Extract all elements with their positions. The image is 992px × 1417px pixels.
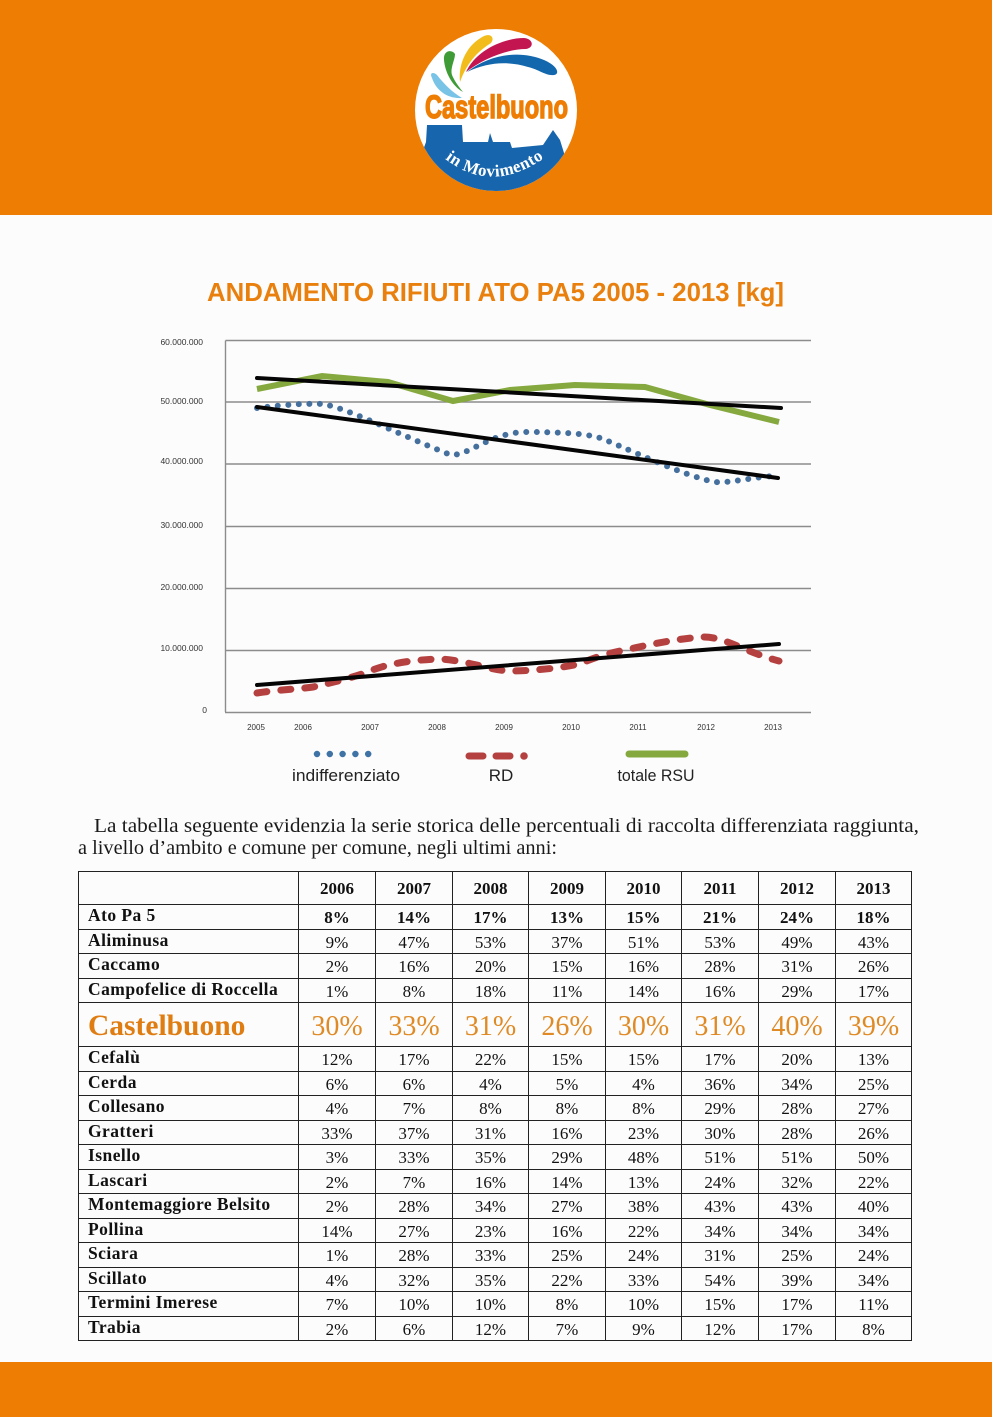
row: Gratteri: 23% — [628, 1124, 659, 1143]
data table — [78, 871, 912, 1341]
x axis labels: 2009 — [495, 723, 513, 732]
x axis labels: 2011 — [629, 723, 647, 732]
row: Termini Imerese: 8% — [556, 1295, 578, 1314]
row: Montemaggiore Belsito: 28% — [398, 1197, 430, 1216]
series: indifferenziato — [257, 404, 779, 482]
row: Ato Pa 5: 15% — [626, 908, 660, 927]
logo: Castelbuono in Movimento — [415, 29, 577, 191]
legend: RD: RD — [489, 766, 513, 785]
row: Montemaggiore Belsito: Montemaggiore Belsito — [88, 1194, 271, 1214]
row: Castelbuono highlighted — [88, 1010, 899, 1042]
row: Scillato: 54% — [704, 1271, 736, 1290]
row: Isnello: 35% — [475, 1148, 506, 1167]
intro paragraph: La tabella seguente evidenzia la serie storica delle percentuali di raccolta differenziata raggiunta, — [94, 816, 919, 837]
row: Lascari: 2% — [326, 1173, 348, 1192]
row: Trabia: 7% — [556, 1320, 578, 1339]
legend: totale RSU — [618, 754, 694, 785]
row: Cerda — [88, 1072, 889, 1094]
row: Castelbuono highlighted: 31% — [465, 1011, 516, 1042]
row: Castelbuono highlighted: 33% — [388, 1011, 440, 1042]
row: Trabia: 8% — [862, 1320, 885, 1339]
row: Lascari — [88, 1170, 889, 1192]
row: Lascari: 16% — [475, 1173, 506, 1192]
row: Cefalù: 15% — [551, 1050, 583, 1069]
row: Trabia: Trabia — [88, 1317, 141, 1337]
row: Collesano: 28% — [781, 1099, 813, 1118]
x axis labels: 2010 — [562, 723, 580, 732]
row: Aliminusa: Aliminusa — [88, 930, 169, 950]
row: Campofelice di Roccella: 11% — [552, 982, 582, 1001]
row: Collesano: 8% — [632, 1099, 655, 1118]
x axis labels: 2007 — [361, 723, 379, 732]
row: Isnello: 51% — [781, 1148, 813, 1167]
row: Isnello: 51% — [704, 1148, 736, 1167]
footer band — [0, 1362, 992, 1417]
row: Scillato: 34% — [858, 1271, 889, 1290]
row: Castelbuono highlighted: 31% — [694, 1011, 746, 1042]
table header: 2013 — [856, 878, 890, 898]
row: Scillato: Scillato — [88, 1268, 147, 1288]
row: Caccamo: Caccamo — [88, 954, 160, 974]
row: Caccamo: 26% — [858, 957, 889, 976]
row: Castelbuono highlighted: 39% — [848, 1011, 899, 1042]
intro paragraph: a livello d’ambito e comune per comune, negli ultimi anni: — [78, 838, 557, 859]
row: Scillato: 33% — [628, 1271, 659, 1290]
row: Campofelice di Roccella: 29% — [781, 982, 813, 1001]
row: Aliminusa: 43% — [858, 933, 889, 952]
x axis labels: 2008 — [428, 723, 446, 732]
row: Gratteri: 31% — [475, 1124, 506, 1143]
x axis labels: 2012 — [697, 723, 715, 732]
y axis labels: 40.000.000 — [160, 456, 203, 466]
row: Isnello: 3% — [326, 1148, 348, 1167]
row: Campofelice di Roccella: 17% — [858, 982, 889, 1001]
row: Lascari: 14% — [551, 1173, 583, 1192]
row: Collesano: 4% — [326, 1099, 348, 1118]
series: totale RSU — [257, 376, 779, 422]
row: Collesano: 27% — [858, 1099, 889, 1118]
row: Cefalù: 17% — [704, 1050, 736, 1069]
row: Sciara: 24% — [628, 1246, 659, 1265]
row: Pollina: 34% — [858, 1222, 889, 1241]
row: Campofelice di Roccella: Campofelice di Roccella — [88, 979, 278, 999]
row: Scillato: 22% — [551, 1271, 583, 1290]
row: Lascari: 22% — [858, 1173, 889, 1192]
row: Montemaggiore Belsito: 43% — [781, 1197, 813, 1216]
table header: 2011 — [703, 878, 737, 898]
row: Cefalù: 20% — [781, 1050, 813, 1069]
y axis labels: 60.000.000 — [160, 337, 203, 347]
row: Pollina: 23% — [475, 1222, 506, 1241]
row: Aliminusa — [88, 930, 889, 952]
row: Ato Pa 5: 18% — [856, 908, 890, 927]
row: Montemaggiore Belsito: 43% — [704, 1197, 736, 1216]
x axis labels — [247, 723, 782, 732]
row: Caccamo — [88, 954, 889, 976]
row: Cefalù: 22% — [475, 1050, 506, 1069]
row: Castelbuono highlighted: Castelbuono — [88, 1010, 245, 1042]
row: Termini Imerese: 10% — [398, 1295, 430, 1314]
x axis labels: 2006 — [294, 723, 312, 732]
row: Aliminusa: 9% — [326, 933, 348, 952]
row: Aliminusa: 47% — [398, 933, 430, 952]
row: Montemaggiore Belsito — [88, 1194, 889, 1216]
row: Sciara: 1% — [326, 1246, 348, 1265]
row: Lascari: 32% — [781, 1173, 813, 1192]
row: Gratteri — [88, 1121, 889, 1143]
intro paragraph — [78, 816, 919, 859]
y axis labels — [160, 337, 207, 715]
table header: 2010 — [626, 878, 660, 898]
row: Gratteri: Gratteri — [88, 1121, 154, 1141]
plot grid — [225, 340, 811, 712]
series: RD — [257, 637, 779, 693]
row: Pollina: 34% — [704, 1222, 736, 1241]
row: Cerda: 4% — [632, 1075, 655, 1094]
row: Ato Pa 5 — [88, 905, 890, 927]
row: Cefalù: 17% — [398, 1050, 430, 1069]
row: Trabia: 17% — [781, 1320, 813, 1339]
table header — [88, 878, 899, 1339]
row: Cerda: 5% — [556, 1075, 578, 1094]
row: Scillato: 4% — [326, 1271, 348, 1290]
row: Lascari: 13% — [628, 1173, 659, 1192]
row: Ato Pa 5: Ato Pa 5 — [88, 905, 156, 925]
row: Cerda: 6% — [403, 1075, 425, 1094]
row: Cerda: Cerda — [88, 1072, 137, 1092]
row: Termini Imerese: 10% — [628, 1295, 659, 1314]
legend: totale RSU: totale RSU — [618, 766, 694, 785]
row: Cefalù: 13% — [858, 1050, 889, 1069]
row: Aliminusa: 49% — [781, 933, 813, 952]
logo tagline: in Movimento — [445, 150, 542, 177]
x axis labels: 2013 — [764, 723, 782, 732]
row: Caccamo: 2% — [326, 957, 348, 976]
row: Caccamo: 28% — [704, 957, 736, 976]
row: Collesano: Collesano — [88, 1096, 165, 1116]
row: Aliminusa: 37% — [551, 933, 583, 952]
row: Isnello: 33% — [398, 1148, 430, 1167]
row: Caccamo: 16% — [628, 957, 659, 976]
row: Gratteri: 16% — [551, 1124, 583, 1143]
header band — [0, 0, 992, 215]
legend: indifferenziato — [292, 754, 400, 785]
table header: 2007 — [397, 878, 431, 898]
row: Cerda: 4% — [479, 1075, 502, 1094]
row: Ato Pa 5: 24% — [780, 908, 814, 927]
row: Isnello: 48% — [628, 1148, 659, 1167]
row: Campofelice di Roccella: 1% — [326, 982, 348, 1001]
row: Castelbuono highlighted: 26% — [541, 1011, 593, 1042]
row: Castelbuono highlighted: 30% — [311, 1011, 363, 1042]
row: Termini Imerese: 7% — [326, 1295, 348, 1314]
row: Campofelice di Roccella: 18% — [475, 982, 506, 1001]
row: Gratteri: 33% — [321, 1124, 353, 1143]
row: Lascari: 7% — [403, 1173, 425, 1192]
row: Cerda: 36% — [704, 1075, 736, 1094]
row: Scillato: 32% — [398, 1271, 430, 1290]
row: Termini Imerese: 15% — [704, 1295, 736, 1314]
row: Montemaggiore Belsito: 38% — [628, 1197, 659, 1216]
row: Trabia — [88, 1317, 885, 1339]
row: Aliminusa: 53% — [704, 933, 736, 952]
row: Cerda: 6% — [326, 1075, 348, 1094]
row: Caccamo: 16% — [398, 957, 430, 976]
row: Trabia: 12% — [704, 1320, 736, 1339]
legend: indifferenziato: indifferenziato — [292, 766, 400, 785]
row: Campofelice di Roccella: 14% — [628, 982, 659, 1001]
row: Lascari: 24% — [704, 1173, 736, 1192]
row: Isnello: Isnello — [88, 1145, 141, 1165]
row: Pollina: Pollina — [88, 1219, 144, 1239]
row: Sciara: 25% — [551, 1246, 583, 1265]
row: Montemaggiore Belsito: 2% — [326, 1197, 348, 1216]
row: Termini Imerese: 17% — [781, 1295, 813, 1314]
row: Campofelice di Roccella: 8% — [403, 982, 425, 1001]
table header: 2009 — [550, 878, 584, 898]
row: Aliminusa: 51% — [628, 933, 659, 952]
row: Montemaggiore Belsito: 34% — [475, 1197, 506, 1216]
row: Aliminusa: 53% — [475, 933, 506, 952]
row: Trabia: 2% — [326, 1320, 348, 1339]
row: Caccamo: 20% — [475, 957, 506, 976]
row: Sciara: 33% — [475, 1246, 506, 1265]
row: Termini Imerese: Termini Imerese — [88, 1292, 218, 1312]
row: Collesano: 8% — [556, 1099, 578, 1118]
row: Caccamo: 15% — [551, 957, 583, 976]
row: Pollina — [88, 1219, 889, 1241]
row: Sciara: 25% — [781, 1246, 813, 1265]
row: Collesano: 7% — [403, 1099, 425, 1118]
row: Pollina: 34% — [781, 1222, 813, 1241]
row: Castelbuono highlighted: 40% — [771, 1011, 823, 1042]
table header: 2012 — [780, 878, 814, 898]
x axis labels: 2005 — [247, 723, 265, 732]
row: Gratteri: 26% — [858, 1124, 889, 1143]
row: Trabia: 12% — [475, 1320, 506, 1339]
row: Gratteri: 37% — [398, 1124, 430, 1143]
row: Cerda: 25% — [858, 1075, 889, 1094]
row: Sciara: Sciara — [88, 1243, 138, 1263]
row: Sciara: 28% — [398, 1246, 430, 1265]
y axis labels: 20.000.000 — [160, 582, 203, 592]
table header: 2008 — [474, 878, 508, 898]
row: Isnello: 50% — [858, 1148, 889, 1167]
row: Ato Pa 5: 17% — [474, 908, 508, 927]
row: Cefalù: 12% — [321, 1050, 353, 1069]
y axis labels: 50.000.000 — [160, 396, 203, 406]
row: Trabia: 9% — [632, 1320, 655, 1339]
row: Caccamo: 31% — [781, 957, 813, 976]
legend: RD — [469, 752, 528, 785]
row: Lascari: Lascari — [88, 1170, 148, 1190]
table header: 2006 — [320, 878, 354, 898]
row: Campofelice di Roccella: 16% — [704, 982, 736, 1001]
row: Cefalù: Cefalù — [88, 1047, 140, 1067]
row: Scillato: 35% — [475, 1271, 506, 1290]
row: Sciara — [88, 1243, 889, 1265]
row: Gratteri: 28% — [781, 1124, 813, 1143]
row: Collesano: 8% — [479, 1099, 502, 1118]
row: Castelbuono highlighted: 30% — [618, 1011, 669, 1042]
row: Campofelice di Roccella — [88, 979, 889, 1001]
row: Pollina: 22% — [628, 1222, 659, 1241]
row: Ato Pa 5: 13% — [550, 908, 584, 927]
row: Isnello: 29% — [551, 1148, 583, 1167]
row: Pollina: 14% — [321, 1222, 353, 1241]
row: Termini Imerese: 10% — [475, 1295, 506, 1314]
row: Termini Imerese: 11% — [858, 1295, 889, 1314]
row: Scillato — [88, 1268, 889, 1290]
row: Scillato: 39% — [781, 1271, 813, 1290]
row: Montemaggiore Belsito: 27% — [551, 1197, 583, 1216]
row: Cefalù — [88, 1047, 889, 1069]
row: Sciara: 24% — [858, 1246, 889, 1265]
row: Cerda: 34% — [781, 1075, 813, 1094]
row: Pollina: 16% — [551, 1222, 583, 1241]
row: Ato Pa 5: 14% — [397, 908, 431, 927]
row: Cefalù: 15% — [628, 1050, 659, 1069]
row: Gratteri: 30% — [704, 1124, 736, 1143]
row: Isnello — [88, 1145, 889, 1167]
row: Collesano: 29% — [704, 1099, 736, 1118]
row: Sciara: 31% — [704, 1246, 736, 1265]
row: Pollina: 27% — [398, 1222, 430, 1241]
row: Ato Pa 5: 8% — [324, 908, 350, 927]
row: Ato Pa 5: 21% — [703, 908, 737, 927]
row: Montemaggiore Belsito: 40% — [858, 1197, 889, 1216]
y axis labels: 10.000.000 — [160, 643, 203, 653]
line chart: andamento rifiuti — [160, 337, 811, 785]
y axis labels: 30.000.000 — [160, 520, 203, 530]
row: Termini Imerese — [88, 1292, 889, 1314]
row: Trabia: 6% — [403, 1320, 425, 1339]
trend lines — [257, 378, 781, 685]
title: ANDAMENTO RIFIUTI ATO PA5 2005 - 2013 [kg] — [207, 277, 784, 307]
y axis labels: 0 — [202, 705, 207, 715]
row: Collesano — [88, 1096, 889, 1118]
